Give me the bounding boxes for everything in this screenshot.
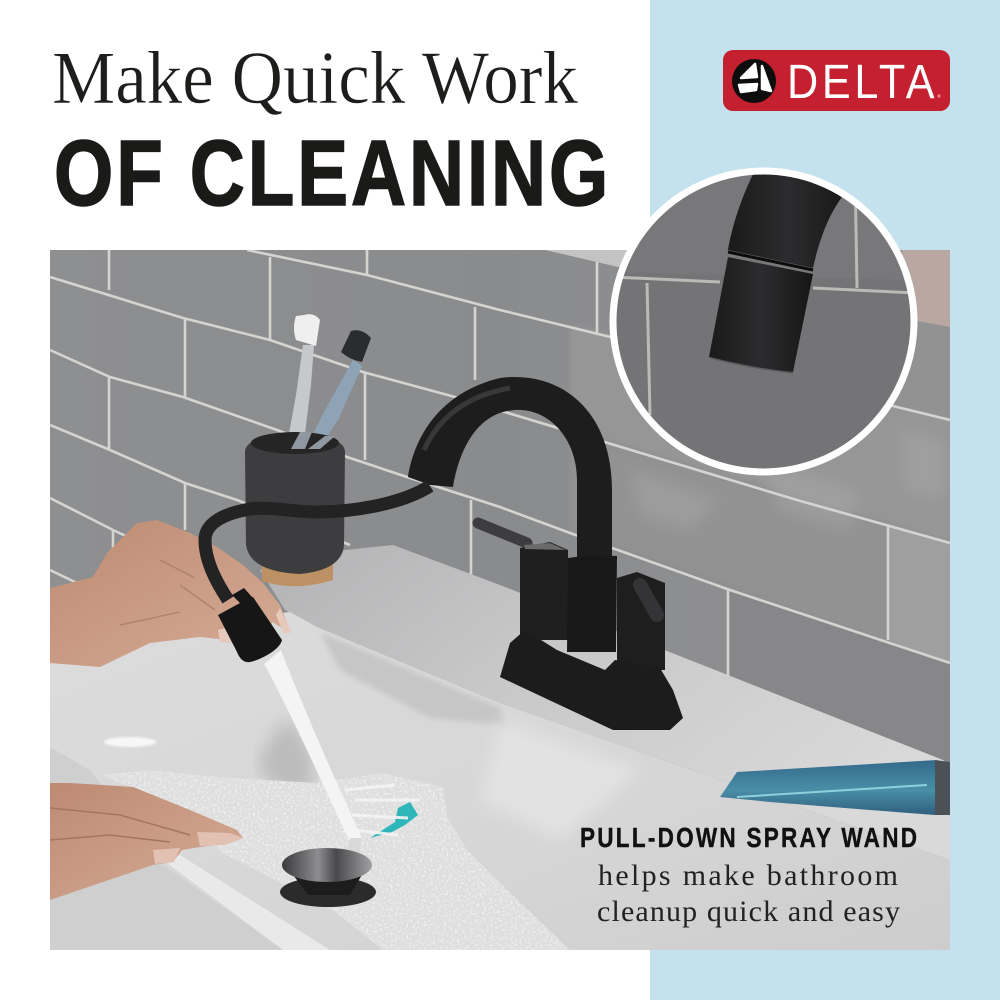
caption body line 2: cleanup quick and easy: [597, 895, 900, 928]
front hand: [50, 783, 243, 900]
blue background panel: [650, 0, 1000, 1000]
front rim: [50, 748, 199, 946]
title line 2: OF CLEANING: [54, 122, 608, 226]
title line 1: Make Quick Work: [52, 37, 578, 120]
sink basin: [50, 612, 950, 950]
water pool: [100, 765, 580, 955]
dark toothbrush: [314, 330, 371, 436]
pull-down hose: [205, 486, 430, 600]
inset detail circle: [613, 170, 915, 472]
counter: [260, 545, 950, 860]
caption heading: PULL-DOWN SPRAY WAND: [580, 823, 917, 854]
faucet spout: [408, 377, 612, 560]
water stream: [264, 650, 362, 842]
drain: [280, 848, 376, 907]
spray wand head: [218, 588, 282, 662]
toothpaste tube: [720, 760, 950, 815]
center stem: [567, 555, 617, 652]
cup with toothbrushes: [245, 314, 371, 586]
fingernails: [153, 832, 243, 864]
logo wordmark: DELTA: [787, 55, 935, 109]
teal toothpaste streaks: [370, 802, 418, 838]
faucet: [205, 377, 683, 730]
caption body line 1: helps make bathroom: [598, 859, 898, 892]
wooden base: [262, 564, 333, 586]
faucet base: [500, 630, 683, 730]
icon: faucet spout close-up: [709, 170, 850, 373]
registered mark: [937, 94, 941, 98]
bathroom photo: [50, 250, 950, 955]
right handle: [617, 572, 665, 670]
caption: [580, 823, 917, 928]
clear toothbrush: [289, 314, 320, 432]
left handle: [478, 523, 568, 640]
wall tiles: [50, 250, 950, 765]
icon: logo triangle: [732, 59, 776, 103]
fingernails: [218, 608, 291, 643]
title: [52, 37, 608, 226]
back hand: [50, 520, 291, 667]
brand logo: [723, 50, 950, 111]
